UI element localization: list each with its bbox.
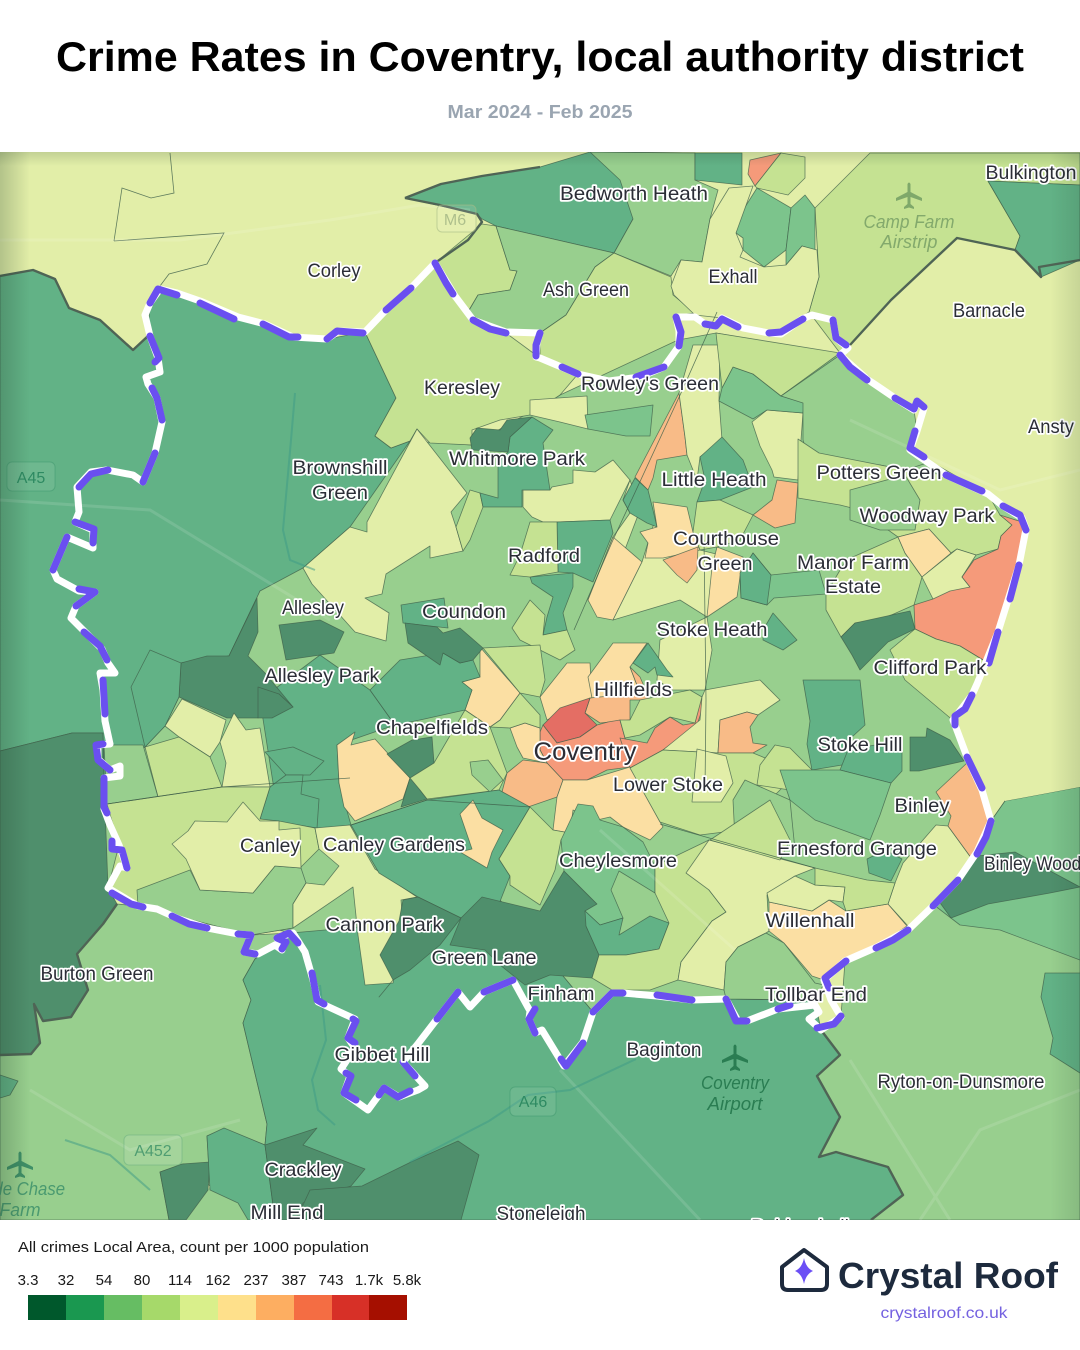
place name labels: Green xyxy=(698,553,752,575)
place name labels: Green xyxy=(312,482,368,504)
airfield labels xyxy=(0,212,954,1220)
place name labels: Radford xyxy=(508,545,580,567)
place name labels: Corley xyxy=(308,260,361,282)
legend value labels: 114 xyxy=(168,1272,192,1289)
place name labels: Crackley xyxy=(264,1159,342,1181)
place name labels: Green Lane xyxy=(432,947,536,969)
legend value labels: 1.7k xyxy=(355,1272,384,1289)
legend value labels: 54 xyxy=(96,1272,112,1289)
map base regions xyxy=(0,152,1080,1220)
place name labels: Courthouse xyxy=(673,528,779,550)
airfield labels: Airport xyxy=(706,1094,764,1114)
place name labels xyxy=(40,162,1080,1238)
place name labels: Burton Green xyxy=(40,963,154,985)
place name labels: Canley xyxy=(240,835,300,857)
rivers xyxy=(65,393,636,1190)
place name labels: Potters Green xyxy=(816,462,942,484)
place name labels: Hillfields xyxy=(594,679,672,701)
legend value labels: 3.3 xyxy=(18,1272,38,1289)
place name labels: Lower Stoke xyxy=(613,774,723,796)
airfield labels: Farm xyxy=(0,1200,40,1220)
place name labels: Baginton xyxy=(626,1039,702,1061)
airfield labels: Camp Farm xyxy=(864,212,954,232)
place name labels: Stoneleigh xyxy=(496,1203,586,1225)
road shields xyxy=(7,205,556,1165)
place name labels: Bedworth Heath xyxy=(560,183,708,205)
legend title: All crimes Local Area, count per 1000 population xyxy=(18,1239,369,1256)
place name labels: Stoke Hill xyxy=(818,734,902,756)
place name labels: Coundon xyxy=(422,601,506,623)
road shields: A46 xyxy=(519,1094,547,1111)
logo: Crystal Roof xyxy=(782,1250,1059,1322)
place name labels: Barnacle xyxy=(953,300,1025,322)
place name labels: Gibbet Hill xyxy=(334,1044,430,1066)
legend value labels: 743 xyxy=(318,1272,344,1289)
icon: airfield Coventry Airport xyxy=(722,1044,748,1071)
place name labels: Mill End xyxy=(250,1202,324,1224)
airfield labels: Airstrip xyxy=(879,232,938,252)
legend value labels: 32 xyxy=(58,1272,74,1289)
airfield labels: Coventry xyxy=(701,1073,770,1093)
faint roads xyxy=(0,205,1080,1220)
place name labels: Bubbenhall xyxy=(751,1216,849,1238)
place name labels: Brownshill xyxy=(292,457,388,479)
place name labels: Clifford Park xyxy=(874,657,987,679)
place name labels: Manor Farm xyxy=(797,552,909,574)
place name labels: Keresley xyxy=(424,377,500,399)
legend value labels: 387 xyxy=(281,1272,307,1289)
legend xyxy=(18,1239,422,1320)
place name labels: Allesley xyxy=(282,597,344,619)
place name labels: Coventry xyxy=(534,738,637,766)
place name labels: Little Heath xyxy=(662,469,766,491)
icon: airfield Camp Farm xyxy=(896,182,922,209)
road shields: A452 xyxy=(134,1143,172,1160)
legend value labels: 162 xyxy=(205,1272,231,1289)
place name labels: Chapelfields xyxy=(376,717,488,739)
place name labels: Binley xyxy=(894,795,950,817)
place name labels: Woodway Park xyxy=(860,505,995,527)
map edge vignette xyxy=(0,152,1080,1220)
place name labels: Estate xyxy=(825,576,881,598)
place name labels: Allesley Park xyxy=(264,665,380,687)
subtitle: date range: Mar 2024 - Feb 2025 xyxy=(448,101,632,122)
wordmark: Crystal Roof xyxy=(838,1255,1059,1296)
icon: house with star xyxy=(782,1250,827,1290)
place name labels: Tollbar End xyxy=(765,984,867,1006)
legend value labels xyxy=(18,1272,422,1289)
place name labels: Cannon Park xyxy=(326,914,443,936)
place name labels: Exhall xyxy=(708,266,758,288)
legend value labels: 5.8k xyxy=(393,1272,422,1289)
district lines xyxy=(107,153,815,868)
thick district borders xyxy=(0,167,1080,1220)
place name labels: Ryton-on-Dunsmore xyxy=(878,1071,1044,1093)
website url: crystalroof.co.uk xyxy=(880,1305,1009,1322)
place name labels: Ash Green xyxy=(543,279,629,301)
place name labels: Finham xyxy=(528,983,594,1005)
airfield labels: le Chase xyxy=(0,1179,65,1199)
place name labels: Cheylesmore xyxy=(559,850,677,872)
road shields: A45 xyxy=(17,470,45,487)
place name labels: Willenhall xyxy=(766,910,854,932)
place name labels: Stoke Heath xyxy=(656,619,768,641)
road shields: M6 xyxy=(444,212,466,229)
place name labels: Ansty xyxy=(1028,416,1074,438)
interior wards of Coventry xyxy=(104,263,1024,1012)
title: Crime Rates in Coventry, local authority district xyxy=(56,33,1024,80)
place name labels: Bulkington xyxy=(986,162,1076,184)
Coventry boundary dashed line xyxy=(53,263,1026,1110)
place name labels: Ernesford Grange xyxy=(777,838,937,860)
legend value labels: 237 xyxy=(243,1272,269,1289)
place name labels: Whitmore Park xyxy=(449,448,585,470)
legend colour scale xyxy=(28,1295,407,1320)
icon: airfield Chase Farm xyxy=(7,1152,33,1178)
place name labels: Rowley's Green xyxy=(581,373,719,395)
place name labels: Canley Gardens xyxy=(323,834,465,856)
legend value labels: 80 xyxy=(134,1272,150,1289)
